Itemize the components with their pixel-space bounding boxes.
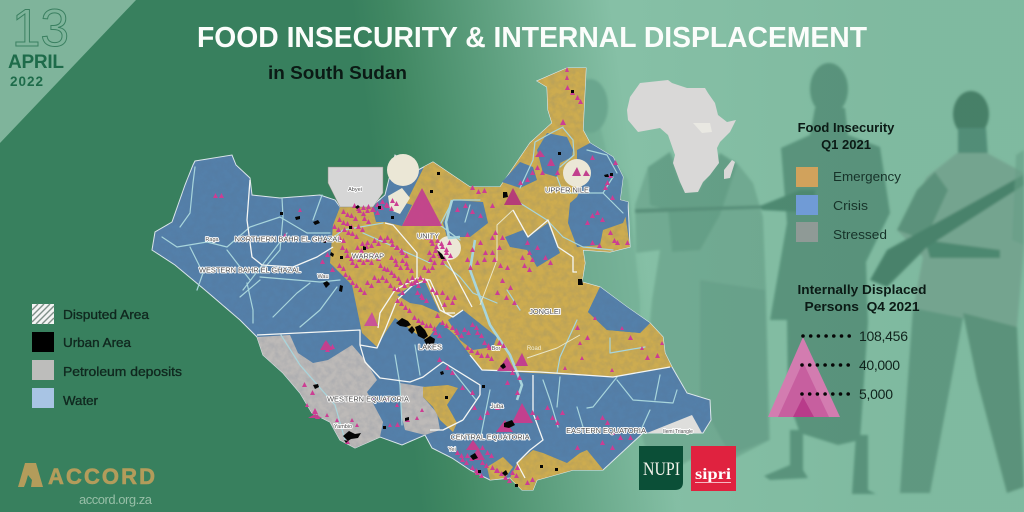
rivers <box>162 127 677 440</box>
map labels: WESTERN BAHR EL GHAZAL <box>199 266 301 274</box>
NUPI logo: NUPI <box>643 459 680 480</box>
value: 108,456: 108,456 <box>859 328 908 344</box>
displacement markers: scattered triangles east and south <box>213 67 664 485</box>
legend: food insecurity <box>796 120 902 242</box>
map labels: WARRAP <box>352 252 384 260</box>
SIPRI logo <box>691 446 736 491</box>
background photo: armed figures in green tint <box>560 63 1024 494</box>
heading: Food Insecurity <box>798 120 895 135</box>
map labels: CENTRAL EQUATORIA <box>450 432 530 442</box>
proportional triangles <box>768 337 840 417</box>
background shading right <box>620 0 1024 512</box>
icon: ACCORD mark <box>18 463 43 487</box>
map labels: Yei <box>448 447 456 453</box>
woman figure <box>635 152 777 480</box>
label: stressed: Stressed <box>833 227 887 242</box>
SIPRI logo: sipri <box>695 466 732 483</box>
middle man <box>760 63 890 494</box>
South Sudan map <box>150 60 720 495</box>
NUPI logo <box>639 446 683 490</box>
map labels: UPPER NILE <box>545 186 589 194</box>
day number: 13 <box>12 0 69 58</box>
wordmark: ACCORD <box>48 464 155 489</box>
administrative borders and roads <box>247 180 670 478</box>
legend: internally displaced persons <box>768 282 927 417</box>
label: crisis: Crisis <box>833 198 869 213</box>
value: 40,000: 40,000 <box>859 357 900 373</box>
map labels: UNITY <box>417 232 439 240</box>
displacement markers: large triangles <box>308 150 590 460</box>
petroleum deposit circles <box>387 154 591 260</box>
subtitle: in South Sudan <box>268 62 407 83</box>
map labels: Yambio <box>334 424 352 430</box>
heading line 2: Persons Q4 2021 <box>804 299 920 314</box>
map labels: Abyei <box>348 187 362 193</box>
label: disputed area: Disputed Area <box>63 307 150 322</box>
swatch: petroleum deposits <box>32 360 54 380</box>
corner triangle <box>0 0 136 143</box>
displacement markers: offset copy for density <box>336 201 519 483</box>
value: 5,000: 5,000 <box>859 386 893 402</box>
map labels: Ilemi Triangle <box>663 429 693 435</box>
swatch: crisis <box>796 195 818 215</box>
map labels: WESTERN EQUATORIA <box>327 394 409 404</box>
label: water: Water <box>63 393 99 408</box>
icon: Africa locator map <box>627 80 736 193</box>
heading: Internally Displaced <box>798 282 927 297</box>
country base: crisis blue <box>152 68 711 490</box>
label: petroleum deposits: Petroleum deposits <box>63 364 183 379</box>
title: FOOD INSECURITY & INTERNAL DISPLACEMENT <box>197 22 868 54</box>
swatch: stressed <box>796 222 818 242</box>
map labels: Road <box>527 346 541 352</box>
figure left behind map <box>560 79 640 340</box>
year: 2022 <box>10 74 43 89</box>
date corner panel <box>0 0 136 143</box>
legend: map features <box>32 304 183 408</box>
swatch: water <box>32 388 54 408</box>
displacement markers: dense triangles in Warrap, Unity, Lakes <box>332 198 515 480</box>
map labels: Raga <box>205 237 220 243</box>
main river: White Nile <box>446 200 522 400</box>
crisis patches over yellow <box>376 133 650 350</box>
map labels: Bor <box>492 346 500 352</box>
website: accord.org.za <box>79 492 153 507</box>
swatch: urban area <box>32 332 54 352</box>
map labels: Wau <box>317 274 329 280</box>
urban areas: black patches <box>280 90 613 487</box>
map labels: EASTERN EQUATORIA <box>566 426 646 435</box>
heading line 2: Q1 2021 <box>821 137 871 152</box>
map labels <box>199 186 693 453</box>
disputed area: Abyei <box>328 167 383 207</box>
swatch: emergency <box>796 167 818 187</box>
disputed area: Ilemi Triangle <box>647 415 702 433</box>
label: emergency: Emergency <box>833 169 902 184</box>
map labels: Juba <box>490 404 504 410</box>
right man <box>870 91 1024 493</box>
swatch: disputed area <box>32 304 54 324</box>
map labels: JONGLEI <box>529 307 561 316</box>
ACCORD logo <box>18 463 155 507</box>
emergency regions: yellow <box>330 68 672 490</box>
stressed / grey regions <box>257 335 440 448</box>
month: APRIL <box>8 52 64 73</box>
label: urban area: Urban Area <box>63 335 132 350</box>
hillshade texture <box>150 60 720 495</box>
region names: NORTHERN BAHR EL GHAZAL <box>235 234 341 244</box>
map labels: LAKES <box>418 342 442 352</box>
dotted leaders <box>802 336 853 394</box>
